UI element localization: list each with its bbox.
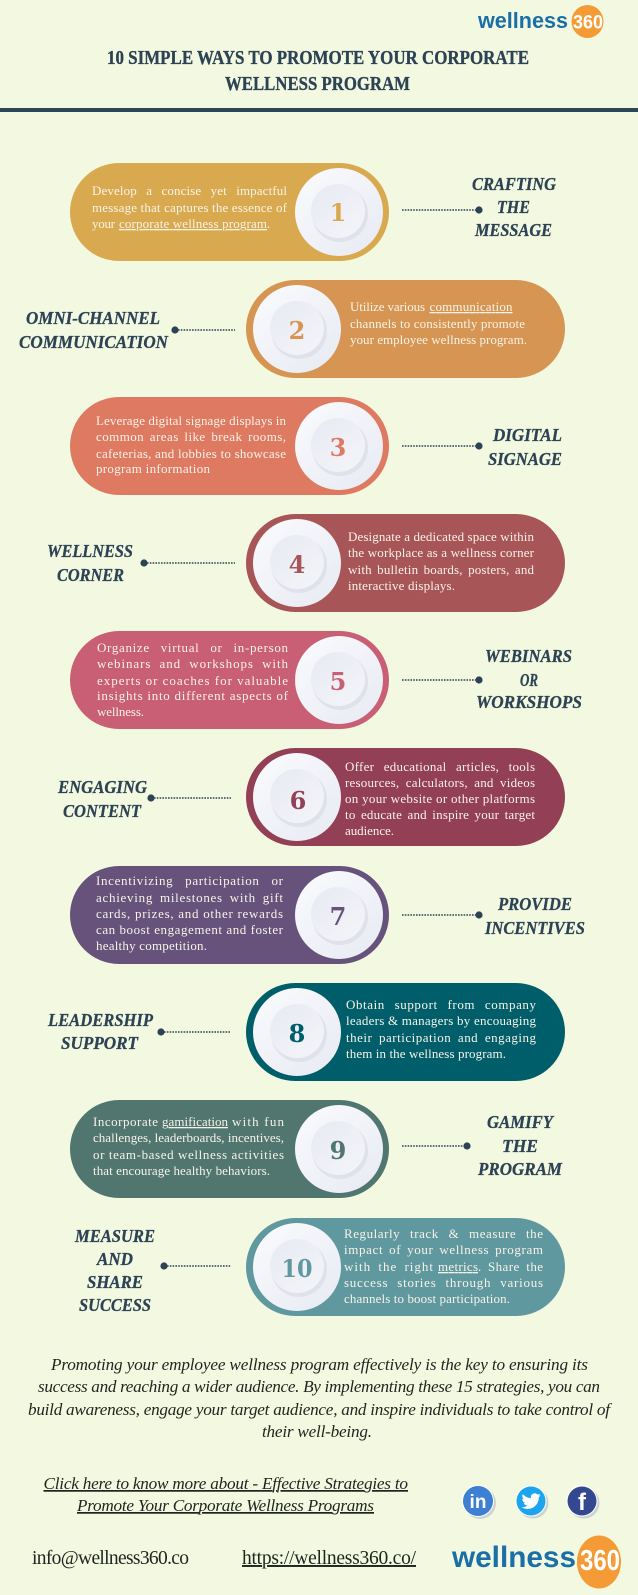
icon: twitter: [516, 1486, 548, 1518]
description 7: healthy competition.: [96, 938, 207, 953]
pill 10: [246, 1218, 565, 1316]
description 1: your: [92, 216, 116, 231]
contact website: https://wellness360.co/: [242, 1548, 417, 1569]
number badge 4: 4: [289, 550, 305, 579]
label 1: MESSAGE: [474, 220, 552, 240]
label 5: [476, 646, 582, 712]
description 2: communication: [430, 299, 513, 314]
closing paragraph: their well-being.: [262, 1422, 372, 1441]
label 5: WEBINARS: [485, 646, 572, 666]
label 2: OMNI-CHANNEL: [26, 308, 160, 328]
description 6: to educate and inspire your target: [345, 807, 535, 822]
label 6: ENGAGING: [57, 777, 147, 797]
pill 6: [246, 748, 565, 846]
logo: bottom wellness360: [451, 1536, 621, 1588]
description 2: your employee wellness program.: [350, 332, 527, 347]
description 10: impact of your wellness program: [344, 1242, 543, 1257]
description 7: can boost engagement and foster: [96, 922, 284, 937]
label 1: [472, 174, 556, 240]
description 5: webinars and workshops with: [97, 656, 288, 671]
description 9: gamification: [162, 1114, 228, 1129]
description 10: .: [478, 1259, 481, 1274]
pill 8: [246, 983, 565, 1081]
logo: top wellness360: [477, 5, 604, 38]
description 10: with the right: [344, 1259, 433, 1274]
number badge 9: [295, 1105, 383, 1193]
label 7: [484, 894, 585, 938]
description 3: program information: [96, 461, 210, 476]
description 1: Develop a concise yet impactful: [92, 183, 287, 198]
description 6: on your website or other platforms: [345, 791, 535, 806]
label 6: [57, 777, 147, 821]
step 4: wellness corner: [47, 514, 565, 612]
label 3: SIGNAGE: [488, 449, 562, 469]
number badge 1: [295, 168, 383, 256]
description 3: cafeterias, and lobbies to showcase: [96, 446, 286, 461]
number badge 3: 3: [330, 433, 346, 462]
icon: linkedin: in: [470, 1492, 486, 1513]
number badge 6: 6: [290, 786, 306, 815]
description 10: success stories through various: [344, 1275, 543, 1290]
title: WELLNESS PROGRAM: [225, 73, 410, 95]
description 4: [348, 529, 535, 593]
label 8: LEADERSHIP: [47, 1010, 154, 1030]
number badge 8: 8: [289, 1019, 305, 1048]
description 5: Organize virtual or in-person: [97, 640, 288, 655]
number badge 5: [295, 636, 383, 724]
label 10: [74, 1226, 155, 1315]
label 8: SUPPORT: [61, 1033, 139, 1053]
label 7: INCENTIVES: [484, 918, 585, 938]
description 8: their participation and engaging: [346, 1030, 536, 1045]
label 8: [47, 1010, 154, 1053]
description 6: [345, 759, 535, 838]
label 10: AND: [96, 1249, 133, 1269]
closing paragraph: [28, 1355, 612, 1441]
number badge 3: [295, 402, 383, 490]
number badge 10: [253, 1223, 341, 1311]
description 2: Utilize various: [350, 299, 425, 314]
pill 4: [246, 514, 565, 612]
label 9: [477, 1112, 563, 1179]
label 1: THE: [497, 197, 530, 217]
description 5: wellness.: [97, 704, 144, 719]
description 9: Incorporate: [93, 1114, 158, 1129]
description 2: channels to consistently promote: [350, 316, 525, 331]
description 7: Incentivizing participation or: [96, 873, 284, 888]
connector 4: [140, 559, 235, 567]
label 7: PROVIDE: [497, 894, 572, 914]
step 1: crafting the message: [70, 163, 556, 261]
logo: bottom wellness360: wellness: [451, 1541, 576, 1574]
description 9: that encourage healthy behaviors.: [93, 1163, 270, 1178]
description 10: [344, 1226, 543, 1306]
pill 2: [246, 280, 565, 378]
number badge 4: [253, 519, 341, 607]
description 5: [97, 640, 289, 719]
description 1: corporate wellness program: [119, 216, 267, 231]
label 3: [488, 425, 562, 469]
description 8: Obtain support from company: [346, 997, 536, 1012]
title: 10 SIMPLE WAYS TO PROMOTE YOUR CORPORATE: [107, 47, 529, 69]
number badge 6: [253, 753, 341, 841]
description 3: [96, 413, 286, 476]
description 6: audience.: [345, 823, 394, 838]
label 1: CRAFTING: [472, 174, 556, 194]
number badge 2: [253, 285, 341, 373]
logo: bottom wellness360: 360: [580, 1545, 620, 1577]
link: effective strategies: Click here to know more about - Effective Strategies to: [44, 1474, 408, 1493]
step 5: webinars or workshops: [70, 631, 582, 729]
link: effective strategies: Promote Your Corporate Wellness Programs: [76, 1496, 374, 1515]
step 6: engaging content: [57, 748, 565, 846]
connector 1: [402, 206, 483, 214]
label 4: WELLNESS: [47, 541, 133, 561]
connector 3: [402, 442, 483, 450]
description 5: insights into different aspects of: [97, 688, 289, 703]
connector 5: [402, 676, 483, 684]
step 10: measure and share success: [74, 1218, 565, 1316]
title: [107, 47, 529, 95]
number badge 10: 10: [282, 1254, 312, 1283]
connector 8: [157, 1028, 231, 1036]
label 9: PROGRAM: [477, 1159, 563, 1179]
logo: top wellness360: 360: [573, 12, 603, 34]
description 8: them in the wellness program.: [346, 1046, 506, 1061]
link: effective strategies: [44, 1474, 408, 1515]
description 4: the workplace as a wellness corner: [348, 545, 535, 560]
label 9: THE: [502, 1136, 538, 1156]
description 9: or team-based wellness activities: [93, 1147, 284, 1162]
label 6: CONTENT: [63, 801, 142, 821]
number badge 5: 5: [330, 667, 346, 696]
connector 10: [160, 1262, 231, 1270]
label 3: DIGITAL: [492, 425, 562, 445]
connector 6: [147, 794, 231, 802]
label 4: CORNER: [57, 565, 124, 585]
description 2: [350, 299, 527, 347]
description 4: with bulletin boards, posters, and: [348, 562, 534, 577]
icon: linkedin: [462, 1485, 496, 1519]
closing paragraph: success and reaching a wider audience. By implementing these 15 strategies, you can: [38, 1377, 600, 1396]
description 8: [346, 997, 536, 1061]
contact email: info@wellness360.co: [32, 1548, 189, 1569]
description 4: Designate a dedicated space within: [348, 529, 534, 544]
label 10: SUCCESS: [79, 1295, 151, 1315]
description 1: .: [267, 216, 270, 231]
connector 2: [171, 326, 235, 334]
pill 3: [70, 397, 389, 495]
description 6: resources, calculators, and videos: [345, 775, 535, 790]
description 1: [92, 183, 288, 231]
label 5: WORKSHOPS: [476, 692, 582, 712]
label 10: MEASURE: [74, 1226, 155, 1246]
number badge 1: 1: [330, 198, 346, 227]
description 9: challenges, leaderboards, incentives,: [93, 1130, 284, 1145]
label 5: OR: [520, 670, 538, 690]
step 8: leadership support: [47, 983, 565, 1081]
closing paragraph: Promoting your employee wellness program effectively is the key to ensuring its: [50, 1355, 588, 1374]
connector 9: [402, 1142, 471, 1150]
step 7: provide incentives: [70, 866, 585, 964]
pill 9: [70, 1100, 389, 1198]
label 4: [47, 541, 133, 585]
step 2: omni-channel communication: [19, 280, 565, 378]
logo: top wellness360: wellness: [477, 8, 568, 33]
description 7: [96, 873, 284, 953]
closing paragraph: build awareness, engage your target audience, and inspire individuals to take control of: [28, 1400, 612, 1419]
description 4: interactive displays.: [348, 578, 455, 593]
description 9: with fun: [232, 1114, 284, 1129]
icon: facebook: f: [578, 1489, 587, 1516]
description 10: channels to boost participation.: [344, 1291, 510, 1306]
label 9: GAMIFY: [487, 1112, 555, 1132]
pill 1: [70, 163, 389, 261]
label 10: SHARE: [87, 1272, 143, 1292]
label 2: COMMUNICATION: [19, 332, 169, 352]
description 6: Offer educational articles, tools: [345, 759, 535, 774]
step 3: digital signage: [70, 397, 562, 495]
pill 5: [70, 631, 389, 729]
number badge 8: [253, 988, 341, 1076]
label 2: [19, 308, 169, 352]
description 10: Share the: [488, 1259, 543, 1274]
icon: facebook: [566, 1486, 600, 1518]
number badge 7: [295, 871, 383, 959]
description 5: experts or coaches for valuable: [97, 673, 288, 688]
description 1: message that captures the essence of: [92, 200, 288, 215]
pill 7: [70, 866, 389, 964]
description 7: cards, prizes, and other rewards: [96, 906, 283, 921]
connector 7: [402, 911, 483, 919]
description 3: common areas like break rooms,: [96, 429, 286, 444]
step 9: gamify the program: [70, 1100, 563, 1198]
description 3: Leverage digital signage displays in: [96, 413, 286, 428]
description 7: achieving milestones with gift: [96, 890, 283, 905]
number badge 2: 2: [289, 316, 305, 345]
description 10: metrics: [438, 1259, 478, 1274]
description 9: [93, 1114, 284, 1178]
number badge 9: 9: [330, 1136, 346, 1165]
description 8: leaders & managers by encouaging: [346, 1013, 536, 1028]
number badge 7: 7: [330, 902, 346, 931]
description 10: Regularly track & measure the: [344, 1226, 543, 1241]
